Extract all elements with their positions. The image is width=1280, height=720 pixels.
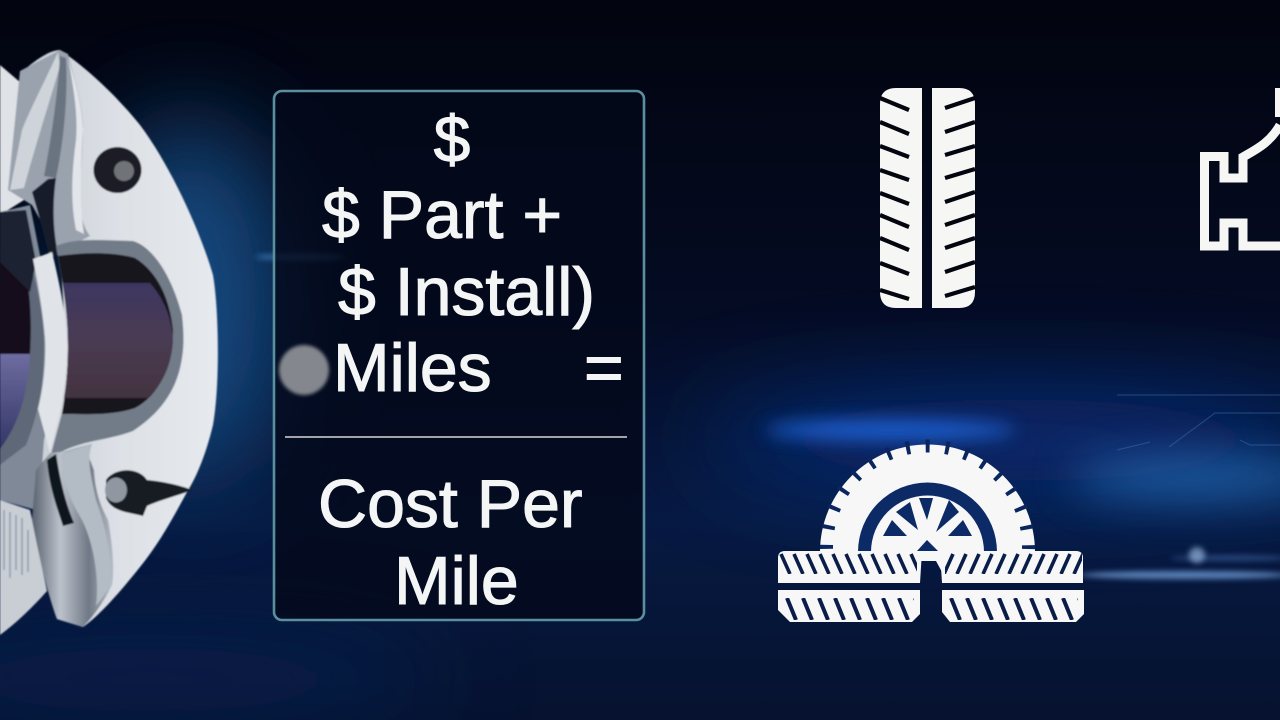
- formula divider: [285, 436, 627, 438]
- icon: wheel and treads: [778, 440, 1084, 622]
- formula: miles: Miles: [333, 330, 492, 406]
- panel top highlight: [320, 90, 640, 92]
- formula numerator: dollar sign: $: [434, 102, 470, 176]
- upper fold: [8, 50, 90, 252]
- rotor texture: [4, 510, 28, 578]
- lower fold: [32, 444, 113, 627]
- bolt: upper: [94, 147, 142, 193]
- icon: tire tread: [880, 88, 975, 308]
- cavity rim: [50, 240, 184, 458]
- cavity shadow: [58, 253, 173, 414]
- result: mile: Mile: [394, 543, 519, 619]
- rotor interior: [0, 205, 50, 510]
- caliper body: [22, 50, 218, 627]
- wheel spokes: [883, 498, 972, 551]
- panel frame: [274, 91, 644, 620]
- formula: install cost: $ Install): [338, 254, 595, 330]
- left rotor piece: bottom: [0, 500, 47, 635]
- cavity interior: [63, 283, 173, 398]
- dark slot: [32, 178, 58, 258]
- icon: check engine: [1204, 88, 1280, 246]
- left rotor piece: top: [0, 65, 28, 215]
- tire half ring: [820, 440, 1035, 551]
- bolt: lower with pin: [105, 470, 192, 516]
- panel: cost per mile formula: [274, 91, 644, 620]
- result: cost per: Cost Per: [318, 466, 583, 542]
- illustration: brake caliper: [0, 50, 218, 635]
- blurred lens spot: [279, 345, 329, 395]
- formula: part cost: $ Part +: [322, 177, 562, 253]
- white band: [33, 252, 67, 453]
- formula: equals sign: =: [584, 330, 624, 406]
- tread bands: [778, 551, 1084, 622]
